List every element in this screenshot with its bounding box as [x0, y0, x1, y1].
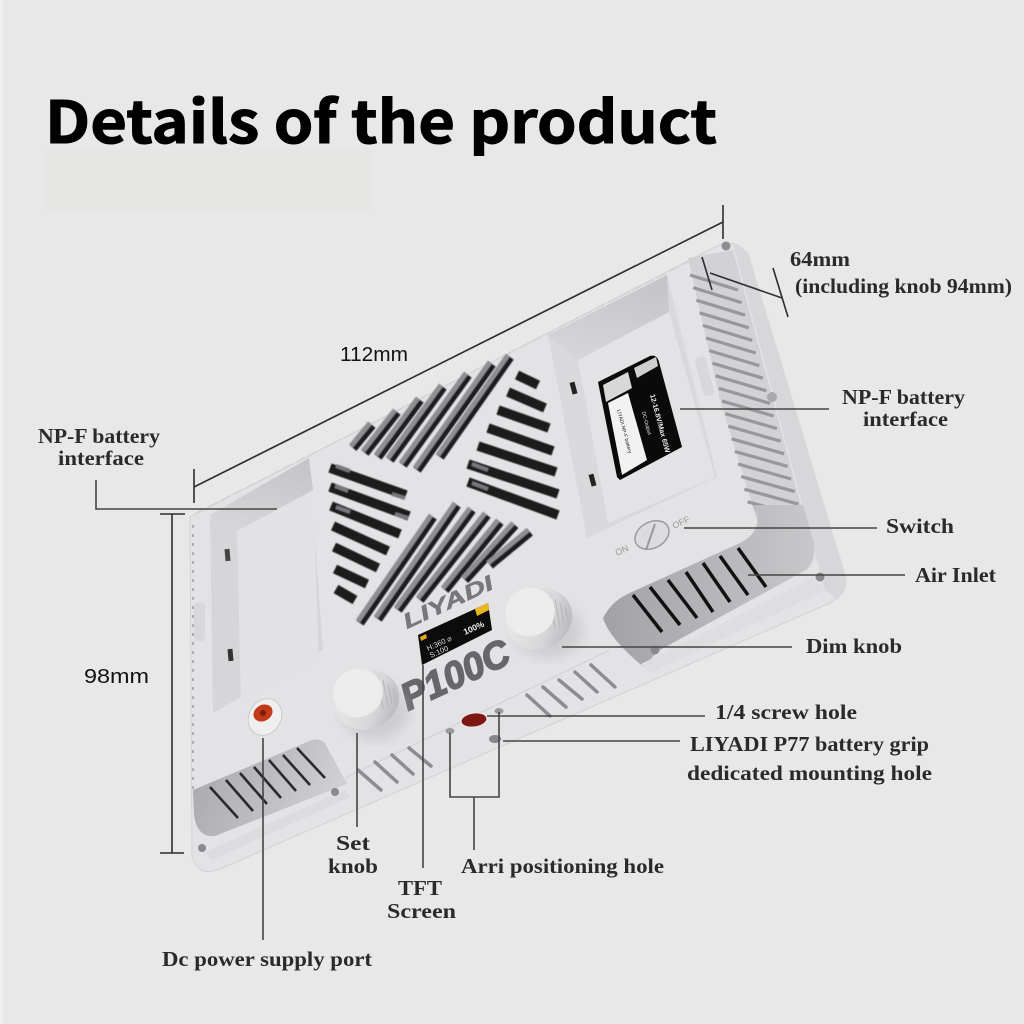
- dimension lines and leader lines: [96, 205, 905, 940]
- label: left NP-F battery interface: interface: [58, 446, 144, 470]
- leader: Arri positioning hole: [450, 712, 499, 850]
- dimension: 64mm: [702, 257, 788, 317]
- panel body: [190, 243, 846, 872]
- label: DC power supply port: Dc power supply port: [162, 947, 372, 971]
- side cooling fins: [688, 250, 813, 550]
- bottom vent triangle: [358, 503, 530, 623]
- battery spec label: [598, 356, 682, 480]
- top vent triangle: [351, 355, 510, 470]
- dimension: 112mm: [194, 205, 723, 503]
- DC power port: [242, 693, 288, 741]
- label: set knob: [328, 831, 378, 878]
- label: 64mm: 64mm: [790, 247, 851, 271]
- title: Details of the product: [45, 76, 717, 160]
- TFT screen: [418, 603, 492, 665]
- label: Arri positioning hole: Arri positioning hole: [461, 854, 664, 878]
- left air inlet recess: [193, 740, 350, 860]
- leader: TFT screen: [422, 665, 424, 868]
- battery spec label: DC-Output: [640, 411, 652, 436]
- label: TFT screen: TFT: [398, 876, 442, 900]
- leader: left NP-F battery interface: [96, 480, 277, 509]
- leader: dim knob: [562, 646, 792, 648]
- right battery recess: [548, 275, 717, 538]
- centre vent grille: [330, 355, 558, 623]
- label: set knob: knob: [328, 854, 378, 878]
- label: TFT screen: Screen: [387, 899, 456, 923]
- label: 98mm: 98mm: [84, 666, 149, 688]
- leader: air inlet: [748, 574, 905, 576]
- power switch: [614, 514, 692, 558]
- label: including knob: (including knob 94mm): [795, 274, 1012, 298]
- air inlet recess: [603, 505, 826, 673]
- leader: right NP-F battery interface: [680, 408, 829, 410]
- leader: battery grip mounting hole: [503, 740, 680, 742]
- label: right NP-F battery interface: NP-F battery: [842, 385, 966, 409]
- label: TFT screen: [387, 876, 456, 923]
- left battery recess: [194, 458, 323, 713]
- brand and model marks: LIYADI: [399, 571, 499, 634]
- set knob: [324, 658, 410, 742]
- label: screw hole: 1/4 screw hole: [715, 700, 857, 724]
- leader: screw hole: [487, 715, 705, 717]
- label: battery grip mounting hole: dedicated mounting hole: [687, 761, 932, 785]
- power switch: OFF: [671, 514, 692, 531]
- TFT screen: 100%: [462, 619, 486, 637]
- left vent triangle: [330, 468, 409, 600]
- label: 112mm: 112mm: [340, 344, 408, 366]
- label: battery grip mounting hole: [687, 732, 932, 785]
- label: switch: Switch: [886, 514, 954, 538]
- leader: DC power port: [262, 738, 264, 940]
- leader: switch: [684, 527, 877, 529]
- brand and model marks: [394, 571, 517, 719]
- power switch: ON: [614, 543, 630, 558]
- TFT screen: H:360 ⌀: [425, 634, 454, 653]
- product: light panel back view: [190, 242, 847, 872]
- label: dim knob: Dim knob: [806, 634, 902, 658]
- label: left NP-F battery interface: NP-F battery: [38, 424, 161, 448]
- dimension: 98mm: [160, 514, 185, 853]
- label: air inlet: Air Inlet: [915, 563, 996, 587]
- label: right NP-F battery interface: [842, 385, 966, 431]
- lower edge slots: [358, 665, 615, 790]
- label: set knob: Set: [336, 831, 370, 855]
- battery spec label: LIYADI NP-F battery: [615, 409, 633, 455]
- battery spec label: 12-16.8V/Max 65W: [648, 394, 671, 454]
- label: right NP-F battery interface: interface: [863, 407, 948, 431]
- label: left NP-F battery interface: [38, 424, 161, 470]
- label: battery grip mounting hole: LIYADI P77 battery grip: [690, 732, 929, 756]
- dim knob: [495, 576, 583, 662]
- TFT screen: S:100: [428, 644, 450, 660]
- right vent triangle: [468, 375, 558, 515]
- leader: set knob: [356, 733, 358, 827]
- battery grip port and Arri holes: [446, 708, 504, 743]
- brand and model marks: P100C: [394, 632, 517, 719]
- callout labels: [38, 247, 1012, 971]
